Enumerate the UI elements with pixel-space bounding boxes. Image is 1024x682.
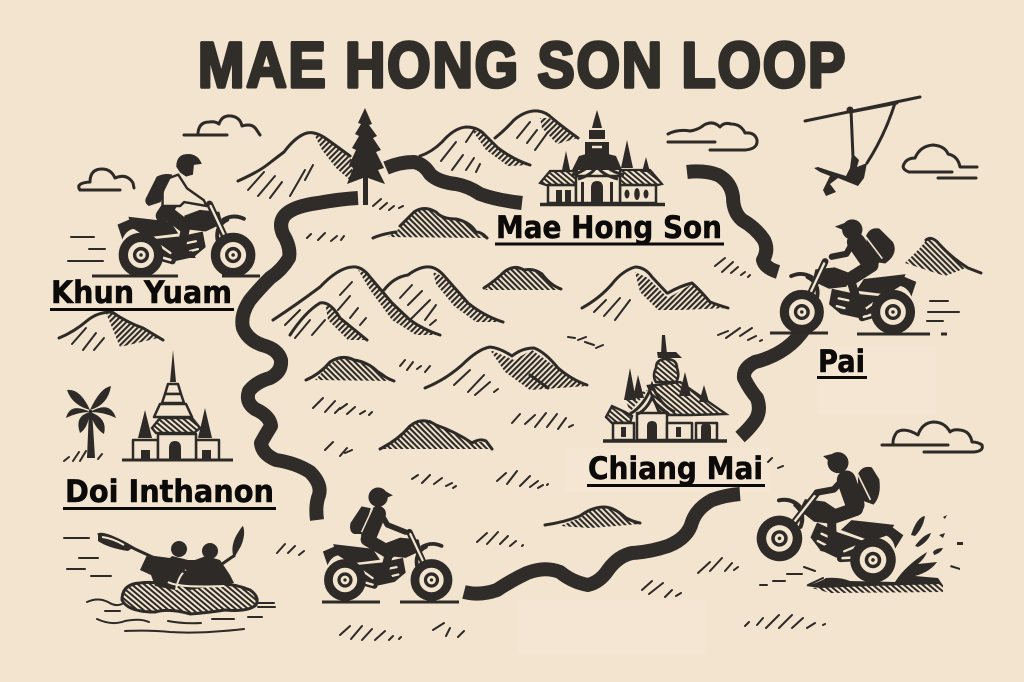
temple: Doi Inthanon <box>122 350 233 460</box>
motorcycle: south rider <box>322 488 459 602</box>
temple: Mae Hong Son <box>540 110 665 204</box>
label: Pai: Pai <box>818 344 865 380</box>
cloud: centre-right <box>668 123 757 150</box>
mountain: cluster lower right <box>545 507 640 528</box>
mountain: top left <box>238 133 352 198</box>
mountain: right centre <box>582 267 728 320</box>
cloud: left <box>79 169 134 190</box>
label: Doi Inthanon: Doi Inthanon <box>65 474 274 510</box>
road: Pai to Chiang Mai <box>740 328 805 437</box>
tree <box>347 108 385 205</box>
road: north-east <box>687 171 778 272</box>
cloud: lower right <box>882 422 982 452</box>
motorcycle: Khun Yuam rider <box>68 154 260 276</box>
mountain: big centre right <box>384 267 503 325</box>
title: MAE HONG SON LOOP <box>198 29 845 101</box>
label: Chiang Mai: Chiang Mai <box>588 451 763 487</box>
mountain: top centre behind <box>495 111 578 150</box>
mountain: central lower <box>425 347 587 395</box>
motorcycle: Pai rider <box>770 219 959 334</box>
road: west side <box>242 198 358 520</box>
motorcycle: splash rider <box>758 439 963 593</box>
mountain: small cluster left <box>306 356 394 381</box>
mountain: big centre left <box>273 267 441 338</box>
road segments <box>242 162 805 594</box>
road: south <box>464 494 740 594</box>
label: Khun Yuam: Khun Yuam <box>51 275 232 311</box>
icon: palm tree <box>64 386 116 461</box>
mountain: big centre front <box>290 302 367 340</box>
mountain: far right <box>905 238 981 276</box>
paper patches <box>517 347 936 654</box>
mountain: left <box>59 312 163 350</box>
temple: Chiang Mai <box>603 335 727 441</box>
zipline rider <box>805 97 920 196</box>
cloud: top centre-left <box>184 116 260 135</box>
raft <box>64 526 275 633</box>
mountain: cluster beside Mae Hong Son <box>373 207 487 238</box>
label: Mae Hong Son: Mae Hong Son <box>496 210 722 246</box>
mountain: cluster lower centre <box>380 420 492 449</box>
mountains <box>59 111 981 528</box>
grass tick marks <box>277 199 825 640</box>
road: north <box>386 162 522 203</box>
mountain: top centre <box>420 127 530 172</box>
cloud: top right <box>903 145 977 178</box>
mountain: cluster centre <box>484 267 562 290</box>
clouds <box>79 116 982 452</box>
